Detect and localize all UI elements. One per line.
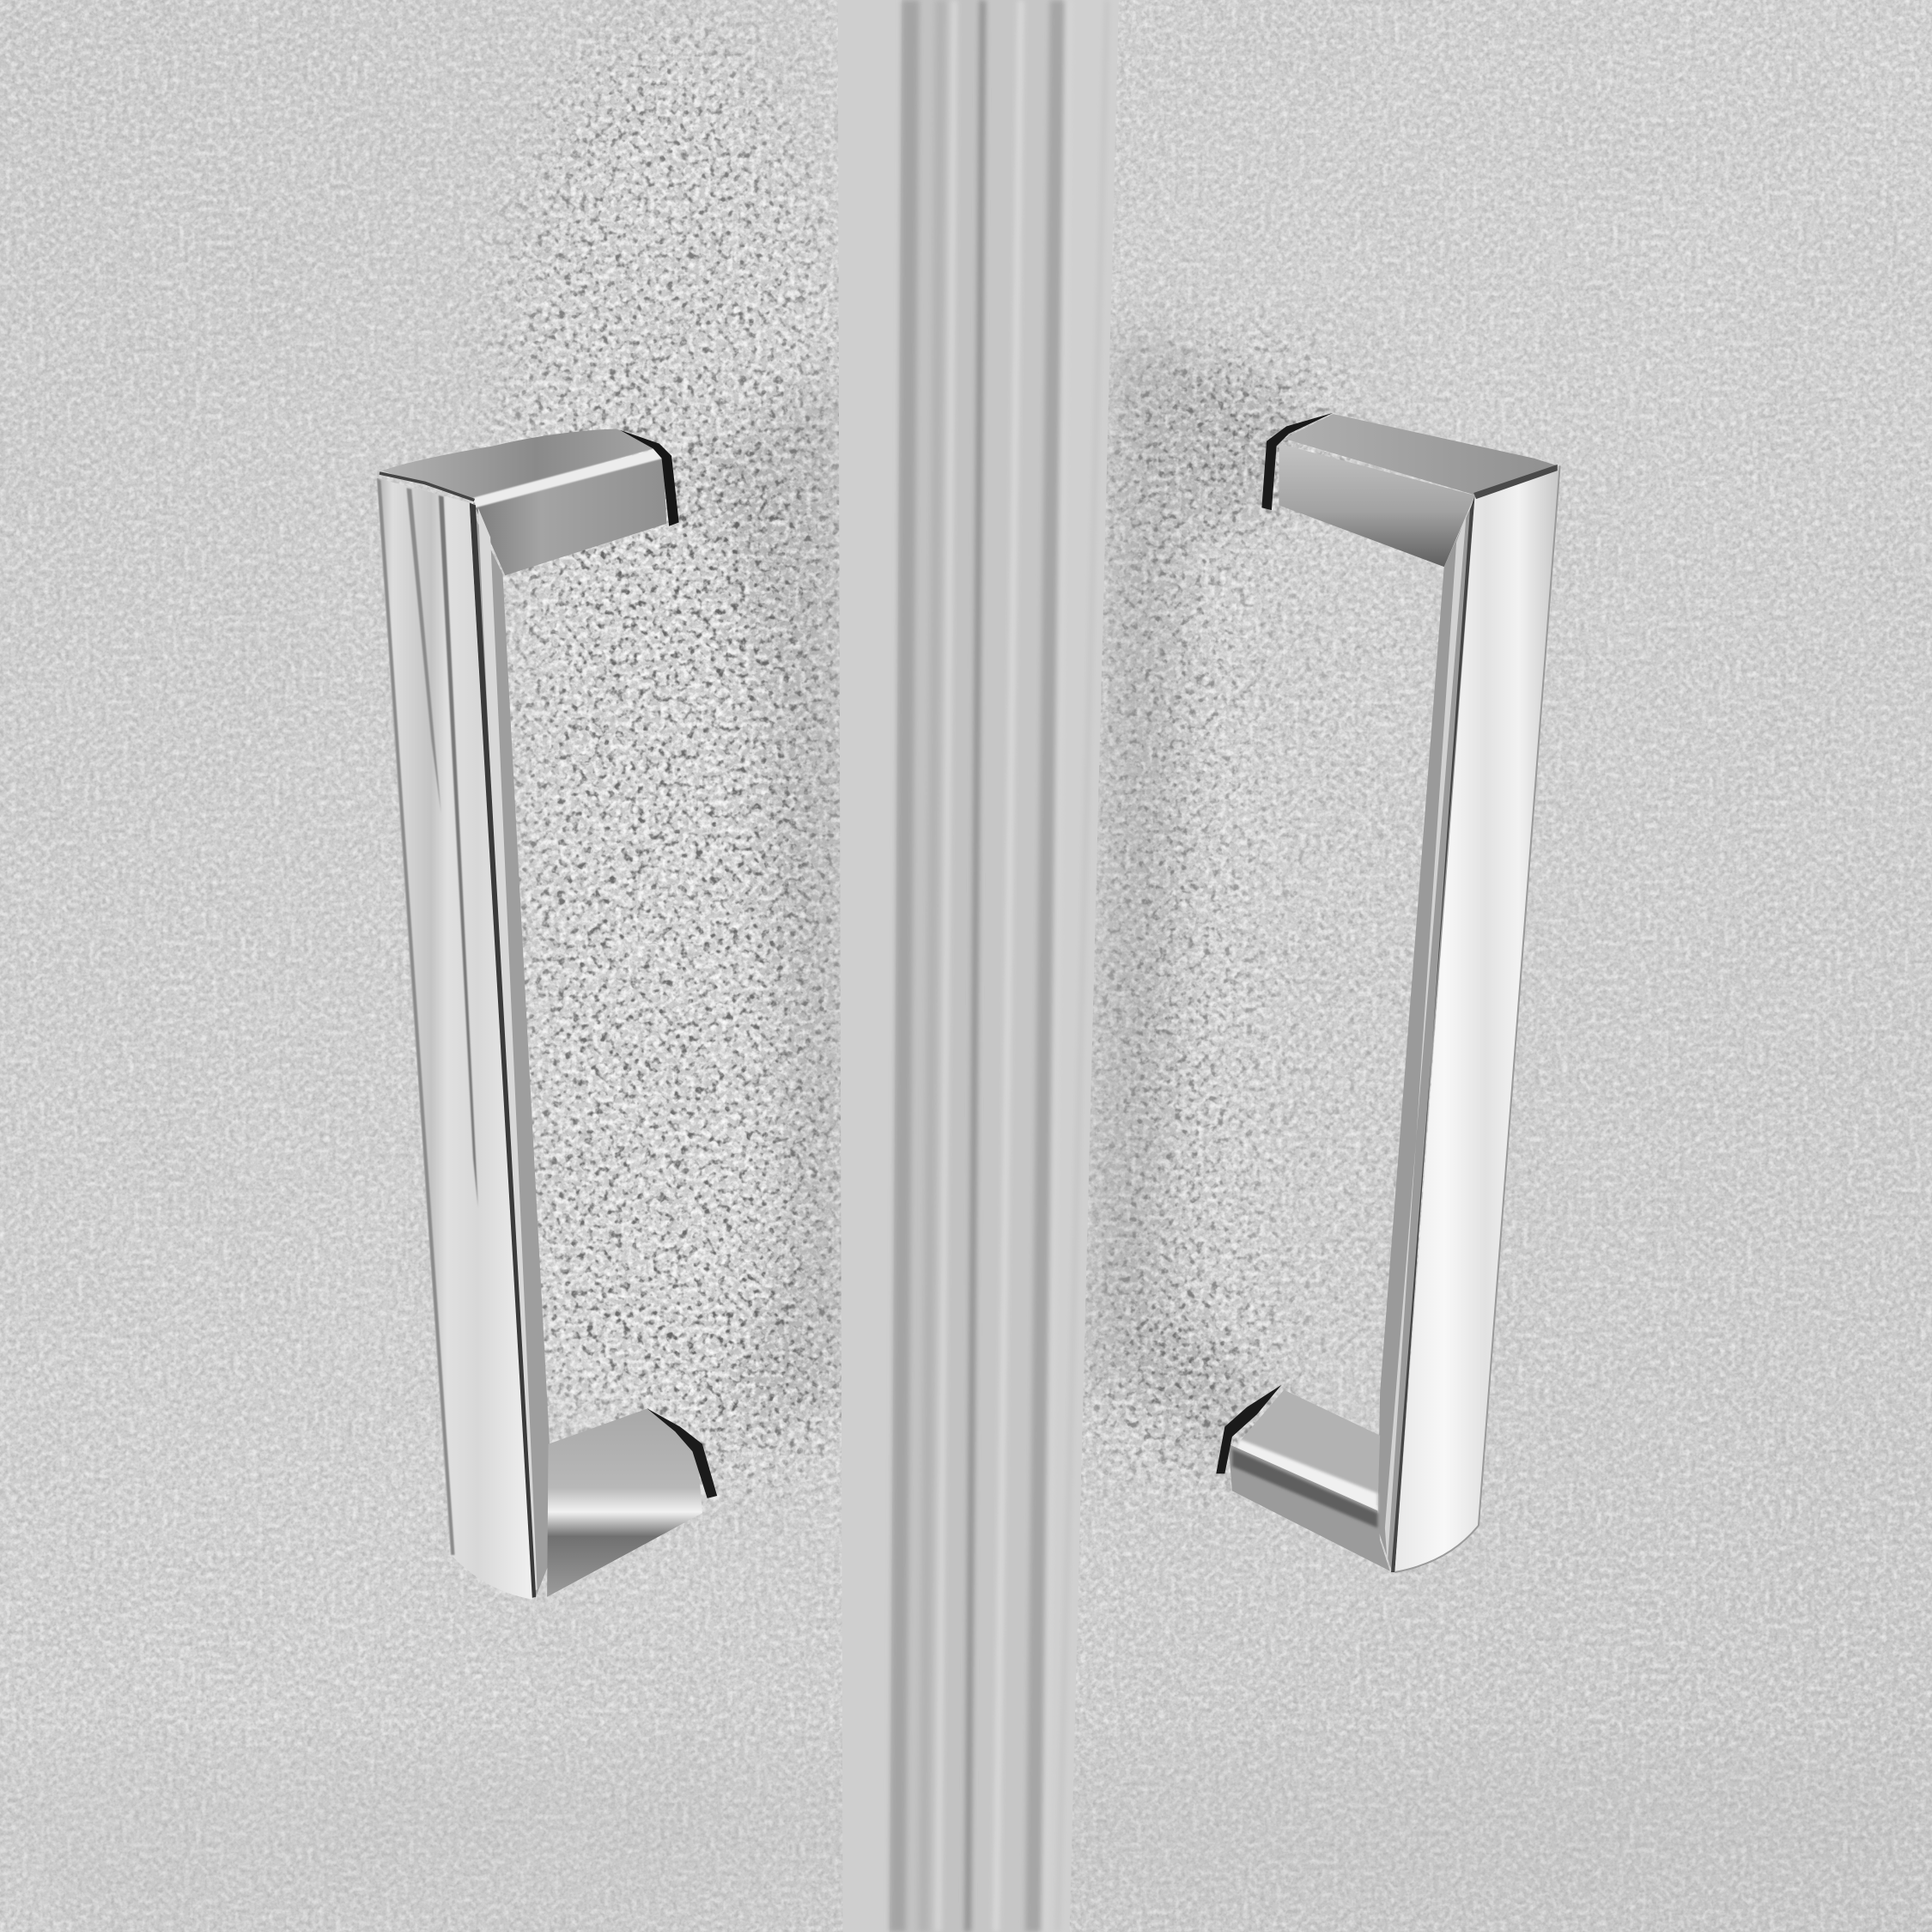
bottom arm lower face <box>1229 1444 1390 1571</box>
seal: left channel <box>890 0 982 1932</box>
mounting gap bottom <box>1216 1385 1281 1473</box>
left handle bottom arm <box>547 1408 702 1597</box>
left handle vertical front <box>377 478 532 1600</box>
panel: right clear edge strip <box>1037 0 1119 1932</box>
corner cap edge <box>1473 465 1558 499</box>
left handle top arm top face <box>382 428 663 501</box>
right chrome handle <box>1216 413 1560 1572</box>
right handle top arm top face <box>1284 414 1558 495</box>
corner cap edge <box>380 473 474 501</box>
right handle top arm side face <box>1279 444 1475 567</box>
speckled dark glass pattern around handles <box>459 0 1431 1525</box>
central door seal profile <box>838 0 1119 1932</box>
bottom arm highlight <box>1235 1439 1377 1513</box>
left chrome handle <box>377 428 717 1600</box>
seal: ribs and highlights <box>890 0 1109 1932</box>
front shading lines <box>377 478 478 1555</box>
left handle top arm side face <box>473 453 666 575</box>
highlight on top arm edge <box>473 447 663 507</box>
mounting gap bottom <box>647 1408 717 1498</box>
seal: right channel <box>967 0 1062 1932</box>
right handle vertical inner side <box>1377 495 1476 1572</box>
left handle vertical inner side <box>468 502 550 1600</box>
panel: left clear edge strip <box>838 0 902 1932</box>
mounting gap top <box>620 430 679 526</box>
right handle outer edge <box>1394 465 1560 1572</box>
right handle bottom arm top face <box>1240 1390 1380 1506</box>
right handle vertical front <box>1394 465 1560 1572</box>
mounting gap top <box>1261 413 1334 510</box>
